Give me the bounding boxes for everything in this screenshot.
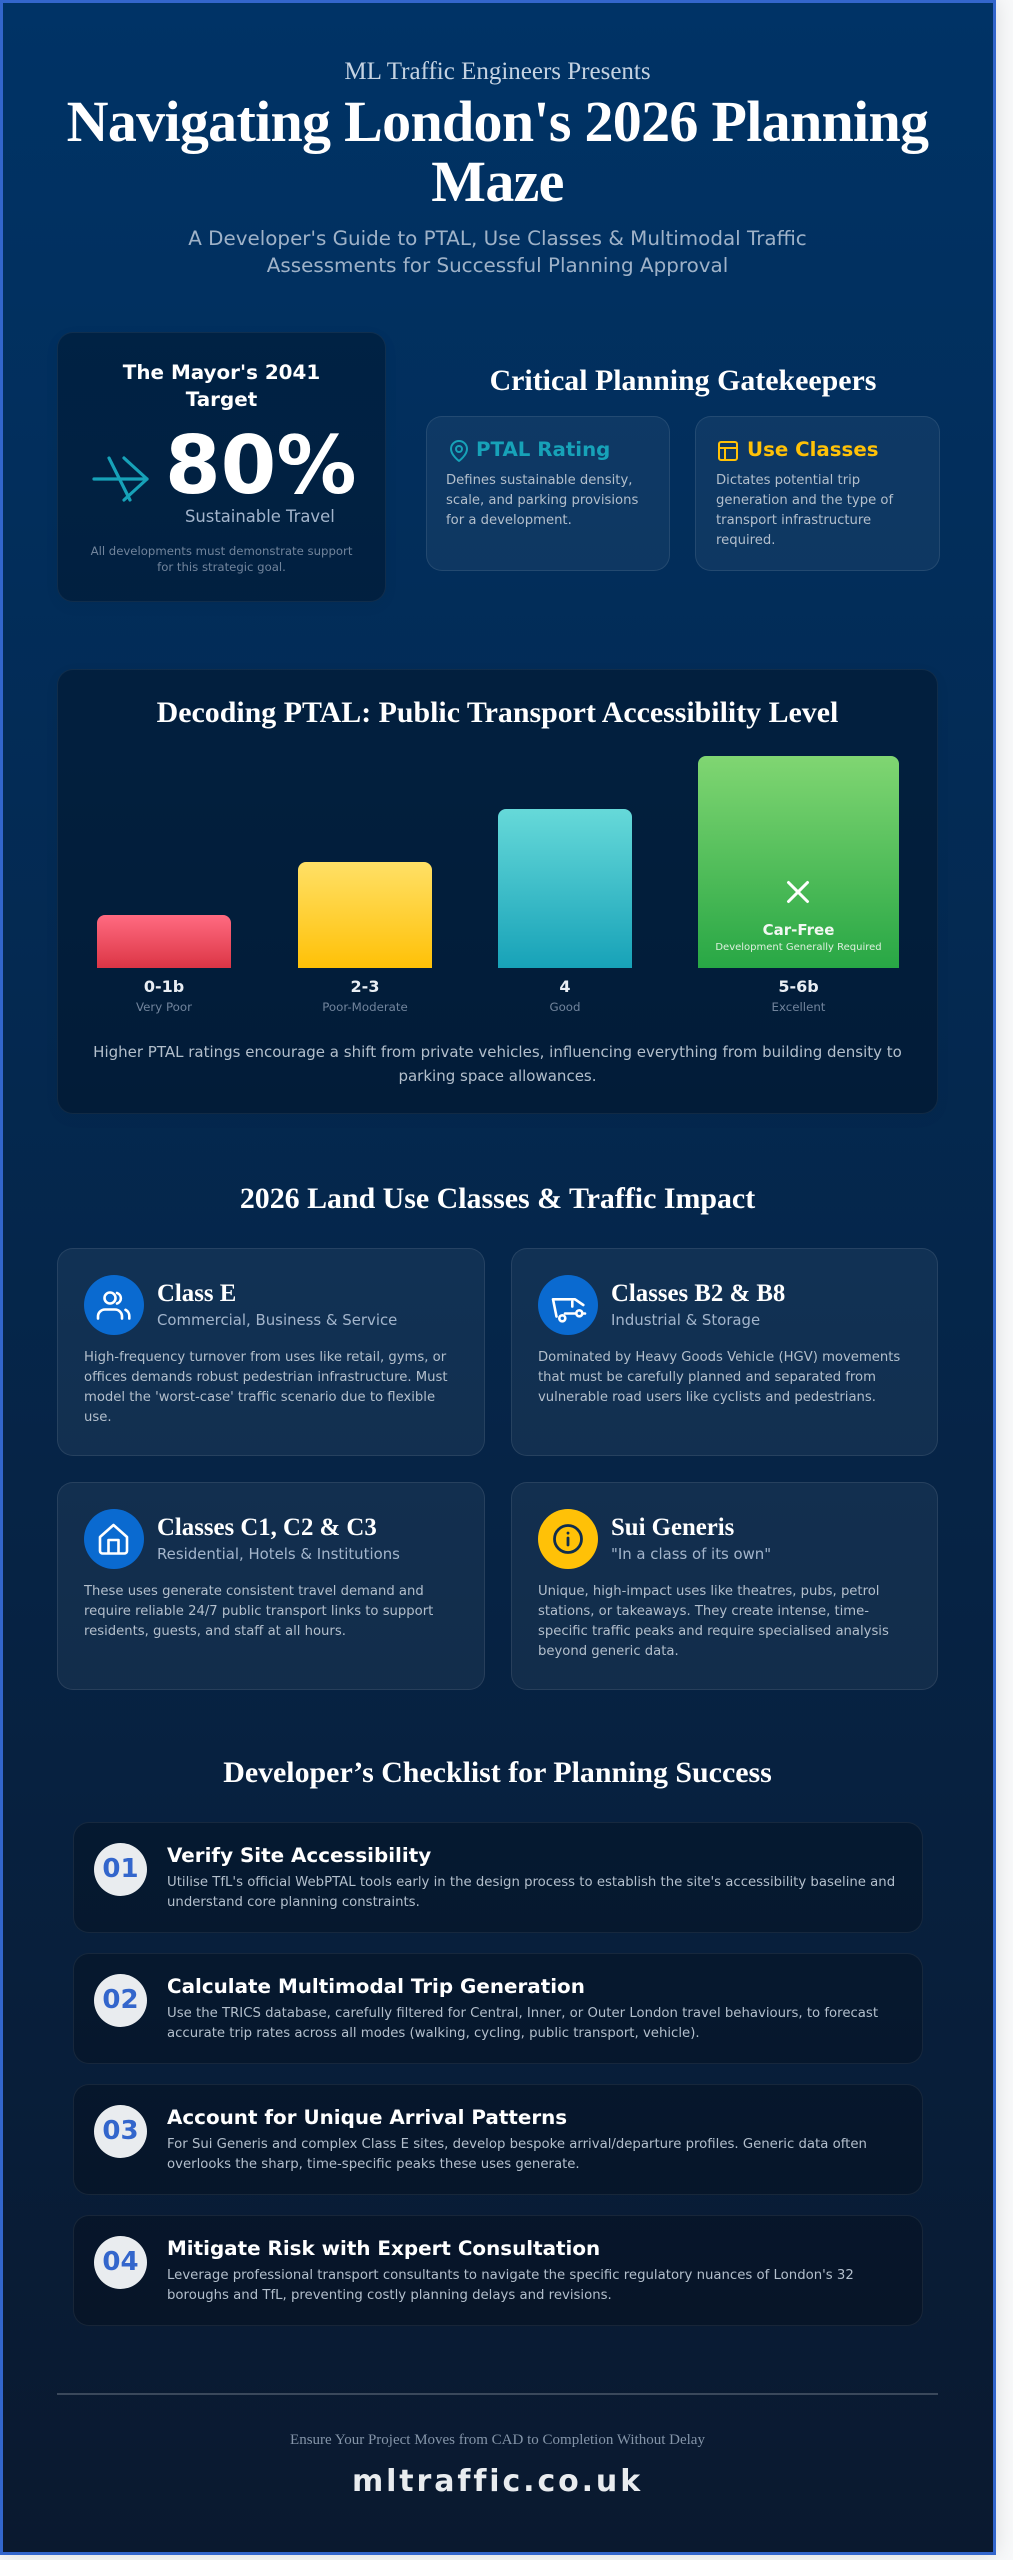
class E description: High-frequency turnover from uses like retail, gyms, or	[84, 1350, 446, 1365]
PTAL description: scale, and parking provisions	[446, 493, 638, 508]
header	[67, 58, 928, 277]
step 03 description	[167, 2137, 867, 2172]
checklist step 03	[73, 2084, 923, 2195]
class E title: Class E	[157, 1280, 236, 1307]
car-free label: Car-Free	[763, 921, 834, 939]
icon: cross	[786, 880, 810, 904]
PTAL explanation: parking space allowances.	[398, 1066, 597, 1084]
main title: Navigating London's 2026 Planning	[67, 89, 928, 154]
classes C1, C2 and C3 description: require reliable 24/7 public transport links to support	[84, 1604, 433, 1619]
classes B2 and B8 description: vulnerable road users like cyclists and pedestrians.	[538, 1390, 876, 1405]
step number 04	[94, 2236, 147, 2289]
icon: home	[84, 1509, 144, 1569]
bar: 0-1b	[97, 915, 231, 968]
step 02 title: Calculate Multimodal Trip Generation	[167, 1975, 585, 1998]
step number 01: 01	[102, 1854, 139, 1884]
panel: use classes	[695, 416, 940, 571]
presenter line: ML Traffic Engineers Presents	[344, 58, 651, 85]
use classes description: transport infrastructure	[716, 513, 871, 528]
car-free note: Development Generally Required	[715, 942, 882, 953]
panel: Mayor's 2041 target	[57, 332, 386, 602]
bar: 4	[498, 809, 632, 968]
sui generis title: Sui Generis	[611, 1514, 734, 1541]
heading: critical planning gatekeepers: Critical Planning Gatekeepers	[490, 364, 876, 397]
step 01 description	[167, 1875, 895, 1910]
sui generis description: beyond generic data.	[538, 1644, 679, 1659]
panel: decoding PTAL	[57, 669, 938, 1114]
classes B2 and B8 description	[538, 1350, 900, 1405]
sui generis description: stations, or takeaways. They create intense, time-	[538, 1604, 869, 1619]
class E description: use.	[84, 1410, 112, 1425]
sui generis description: specific traffic peaks and require specialised analysis	[538, 1624, 889, 1639]
sublabel: very poor: Very Poor	[136, 1000, 192, 1014]
step 01 title: Verify Site Accessibility	[167, 1844, 431, 1867]
subtitle: Assessments for Successful Planning Approval	[267, 254, 728, 277]
PTAL explanation: Higher PTAL ratings encourage a shift from private vehicles, influencing everything from building density to	[93, 1043, 902, 1061]
classes C1, C2 and C3 title: Classes C1, C2 & C3	[157, 1514, 377, 1541]
step 04 title: Mitigate Risk with Expert Consultation	[167, 2237, 600, 2260]
step number 04: 04	[102, 2247, 139, 2277]
class E description: offices demands robust pedestrian infrastructure. Must	[84, 1370, 448, 1385]
sustainable travel label: Sustainable Travel	[185, 507, 335, 526]
bar: 2-3	[298, 862, 432, 968]
heading: land use classes: 2026 Land Use Classes & Traffic Impact	[240, 1182, 755, 1215]
label: 4: 4	[559, 977, 571, 996]
step 02 description	[167, 2006, 878, 2041]
PTAL explanation	[93, 1043, 902, 1084]
checklist step 04	[73, 2215, 923, 2326]
step 02 description: Use the TRICS database, carefully filtered for Central, Inner, or Outer London travel behaviours, to forecast	[167, 2006, 878, 2021]
step number 02: 02	[102, 1985, 139, 2015]
main title: Maze	[431, 149, 564, 214]
step number 03: 03	[102, 2116, 139, 2146]
step number 02	[94, 1974, 147, 2027]
step number 01	[94, 1843, 147, 1896]
label: 5-6b: 5-6b	[778, 977, 819, 996]
panel: class E	[57, 1248, 485, 1456]
bar: 5-6b car-free	[698, 756, 899, 968]
classes B2 and B8 description: Dominated by Heavy Goods Vehicle (HGV) movements	[538, 1350, 900, 1365]
footer	[290, 2432, 705, 2499]
website address: mltraffic.co.uk	[352, 2464, 643, 2499]
bar chart	[97, 756, 899, 1014]
subtitle: A Developer's Guide to PTAL, Use Classes & Multimodal Traffic	[188, 227, 807, 250]
heading: developer checklist: Developer’s Checklist for Planning Success	[223, 1756, 772, 1789]
target heading: The Mayor's 2041	[123, 361, 320, 384]
icon: info	[538, 1509, 598, 1569]
step 04 description: Leverage professional transport consultants to navigate the specific regulatory nuances of London's 32	[167, 2268, 854, 2283]
sublabel: poor-moderate: Poor-Moderate	[322, 1000, 408, 1014]
step 03 description: For Sui Generis and complex Class E sites, develop bespoke arrival/departure profiles. Generic data often	[167, 2137, 867, 2152]
step 03 title: Account for Unique Arrival Patterns	[167, 2106, 567, 2129]
PTAL title: PTAL Rating	[476, 438, 610, 461]
panel: classes C1, C2 and C3	[57, 1482, 485, 1690]
step number 03	[94, 2105, 147, 2158]
step 04 description	[167, 2268, 854, 2303]
classes B2 and B8 title: Classes B2 & B8	[611, 1280, 785, 1307]
class E subtitle: Commercial, Business & Service	[157, 1311, 397, 1329]
classes C1, C2 and C3 subtitle: Residential, Hotels & Institutions	[157, 1545, 400, 1563]
panel: PTAL rating	[426, 416, 670, 571]
label: 0-1b: 0-1b	[144, 977, 184, 996]
checklist step 02	[73, 1953, 923, 2064]
footer tagline: Ensure Your Project Moves from CAD to Completion Without Delay	[290, 2432, 705, 2448]
PTAL description: Defines sustainable density,	[446, 473, 632, 488]
use classes description	[716, 473, 894, 548]
classes C1, C2 and C3 description	[84, 1584, 433, 1639]
PTAL description: for a development.	[446, 513, 572, 528]
target note	[90, 544, 352, 574]
icon: users	[84, 1275, 144, 1335]
main title	[67, 89, 928, 214]
target note: for this strategic goal.	[157, 560, 286, 574]
panel: classes B2 and B8	[511, 1248, 938, 1456]
PTAL description	[446, 473, 638, 528]
sublabel: excellent: Excellent	[772, 1000, 825, 1014]
classes C1, C2 and C3 description: residents, guests, and staff at all hours.	[84, 1624, 346, 1639]
sui generis subtitle: "In a class of its own"	[611, 1545, 771, 1563]
sui generis description	[538, 1584, 889, 1659]
step 02 description: accurate trip rates across all modes (walking, cycling, public transport, vehicle).	[167, 2026, 700, 2041]
80 percent figure: 80%	[165, 419, 356, 512]
panel: sui generis	[511, 1482, 938, 1690]
use classes description: Dictates potential trip	[716, 473, 860, 488]
step 04 description: boroughs and TfL, preventing costly planning delays and revisions.	[167, 2288, 612, 2303]
sublabel: good: Good	[549, 1000, 581, 1014]
class E description: model the 'worst-case' traffic scenario due to flexible	[84, 1390, 435, 1405]
class E description	[84, 1350, 448, 1425]
target note: All developments must demonstrate support	[91, 544, 352, 558]
classes B2 and B8 description: that must be carefully planned and separated from	[538, 1370, 876, 1385]
PTAL heading: Decoding PTAL: Public Transport Accessibility Level	[157, 696, 838, 729]
classes C1, C2 and C3 description: These uses generate consistent travel demand and	[84, 1584, 424, 1599]
step 03 description: overlooks the sharp, time-specific peaks these uses generate.	[167, 2157, 580, 2172]
target heading	[122, 361, 320, 411]
sui generis description: Unique, high-impact uses like theatres, pubs, petrol	[538, 1584, 879, 1599]
target heading: Target	[186, 388, 257, 411]
use classes title: Use Classes	[747, 438, 879, 461]
icon: map pin	[450, 440, 468, 462]
checklist step 01	[73, 1822, 923, 1933]
use classes description: required.	[716, 533, 775, 548]
step 01 description: Utilise TfL's official WebPTAL tools early in the design process to establish the site's accessibility baseline and	[167, 1875, 895, 1890]
icon: truck	[538, 1275, 598, 1335]
icon: layout	[718, 441, 738, 461]
classes B2 and B8 subtitle: Industrial & Storage	[611, 1311, 760, 1329]
step 01 description: understand core planning constraints.	[167, 1895, 420, 1910]
subtitle	[188, 227, 807, 277]
icon: sustainable travel arrow	[92, 456, 149, 502]
label: 2-3: 2-3	[351, 977, 379, 996]
use classes description: generation and the type of	[716, 493, 893, 508]
